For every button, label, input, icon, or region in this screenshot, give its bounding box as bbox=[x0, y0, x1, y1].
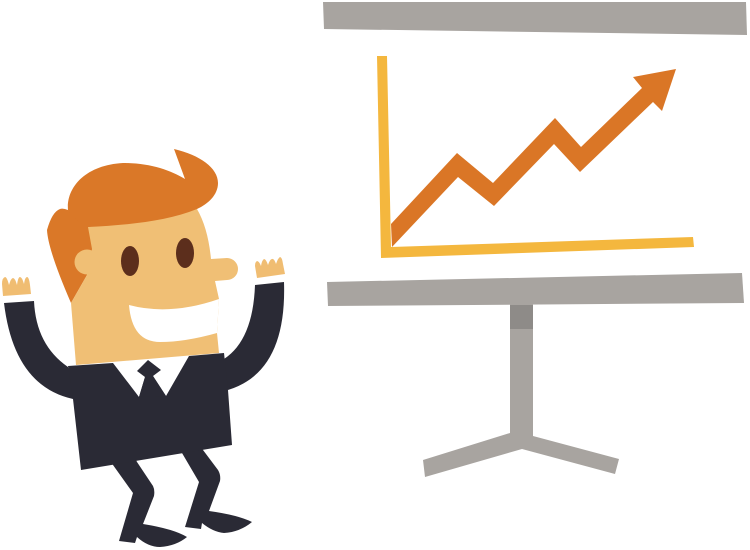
tie bbox=[137, 360, 166, 397]
face bbox=[71, 209, 238, 365]
board stand bbox=[423, 300, 619, 477]
jacket bbox=[68, 353, 232, 470]
top hair bbox=[68, 149, 218, 227]
ear bbox=[74, 250, 100, 274]
board bottom bar bbox=[327, 273, 744, 306]
panel: presentation board bbox=[323, 2, 747, 477]
board top bar bbox=[323, 2, 747, 35]
right arm bbox=[215, 282, 284, 390]
chart axes bbox=[377, 56, 694, 258]
back hair bbox=[47, 209, 95, 303]
left hand bbox=[2, 277, 31, 296]
left arm bbox=[4, 301, 80, 400]
left leg bbox=[110, 456, 187, 547]
right leg bbox=[178, 444, 252, 533]
right hand bbox=[255, 257, 285, 278]
smile bbox=[129, 299, 219, 342]
rising arrow bbox=[391, 69, 676, 247]
businessman character bbox=[2, 149, 285, 547]
left eye bbox=[121, 246, 139, 276]
right eye bbox=[176, 238, 194, 268]
